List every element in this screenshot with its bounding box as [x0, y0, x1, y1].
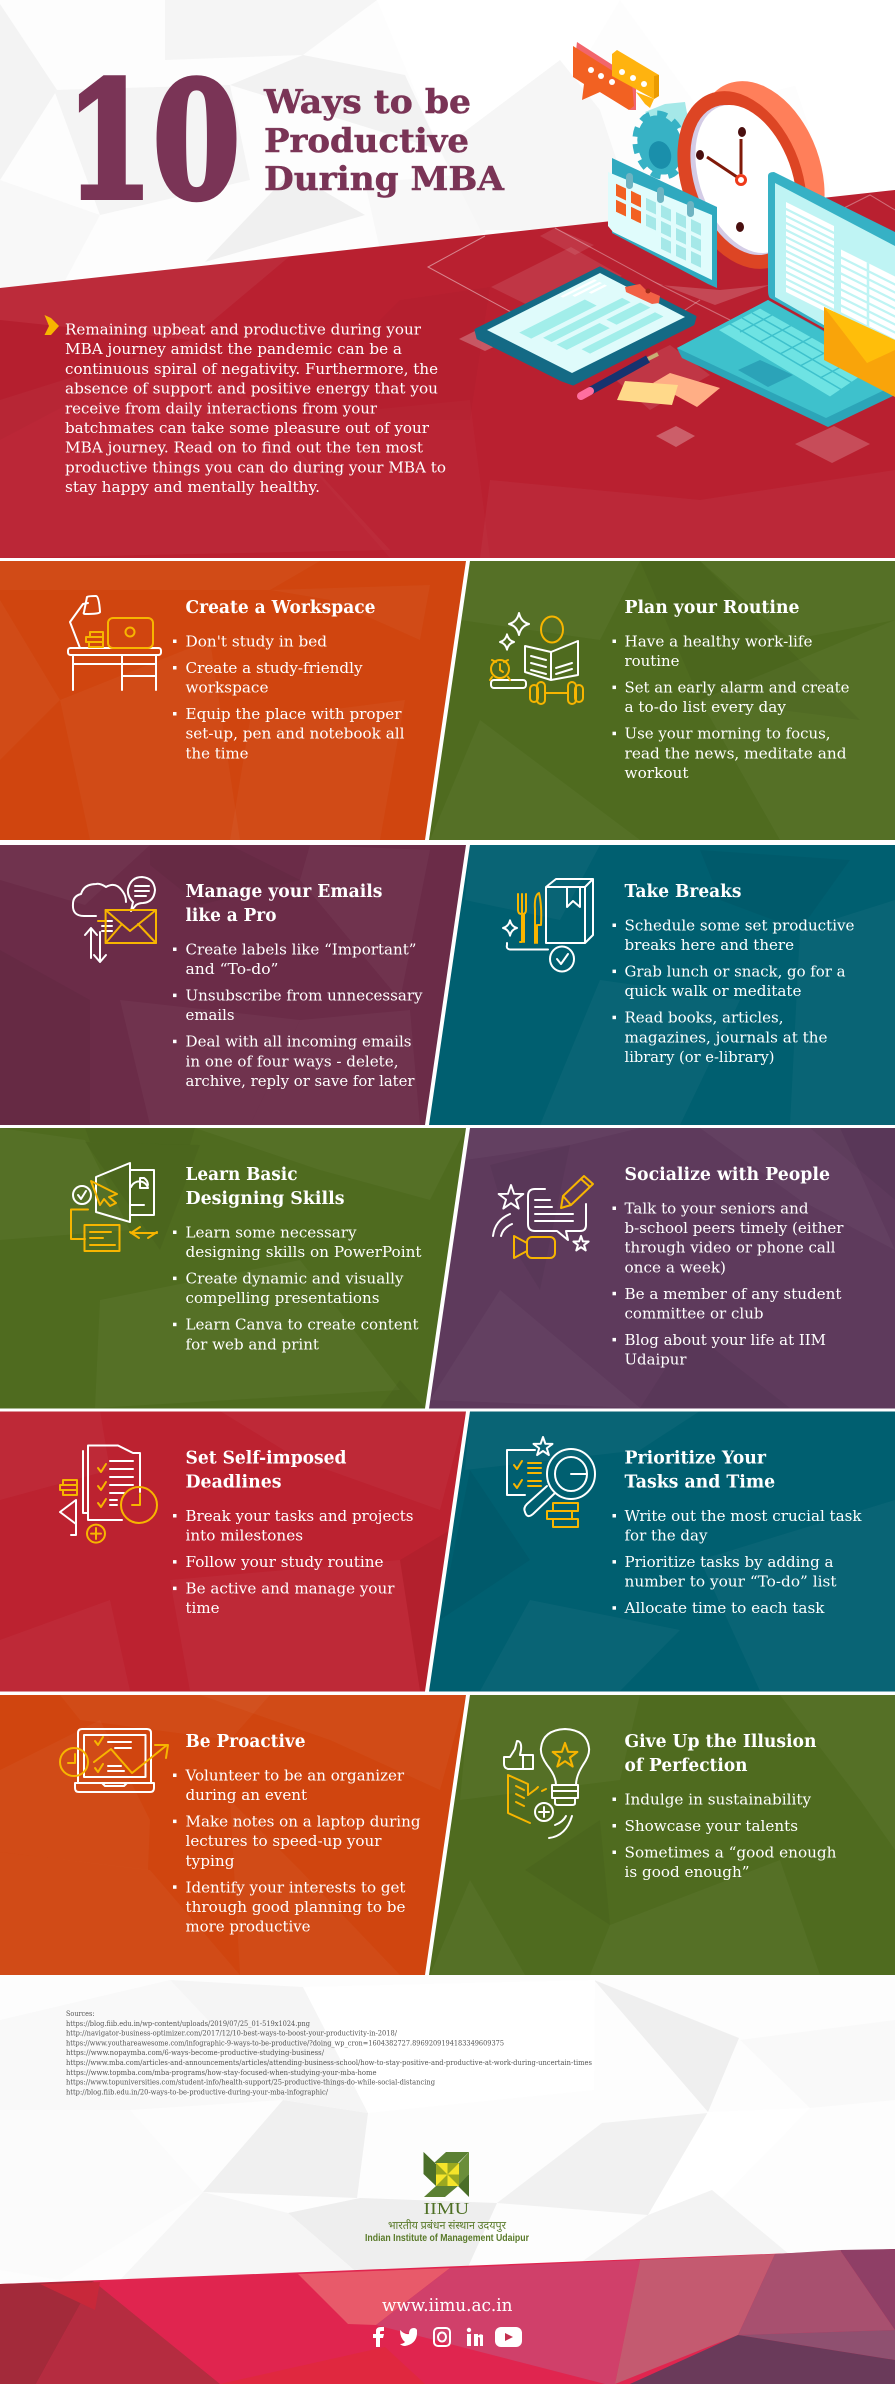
- gear: [631, 102, 690, 180]
- sources list: http://blog.fiib.edu.in/20-ways-to-be-productive-during-your-mba-infographic/: [66, 2087, 328, 2096]
- logo wordmark: IIMU: [424, 2199, 469, 2218]
- panel: Set Self-imposed Deadlines: [0, 1411, 466, 1692]
- bullet list: Follow your study routine: [186, 1555, 384, 1571]
- bullet list: Use your morning to focus,: [624, 727, 830, 743]
- bullet list: Create a study-friendly: [186, 661, 363, 677]
- intro text: stay happy and mentally healthy.: [65, 480, 320, 496]
- icon: facebook: [373, 2327, 384, 2347]
- sources list: https://www.topuniversities.com/student-info/health-support/25-productive-things-do-while-social-distancing: [66, 2078, 435, 2087]
- website: www.iimu.ac.in: [382, 2295, 513, 2316]
- heading: Give Up the Illusion: [624, 1732, 817, 1752]
- heading: like a Pro: [186, 906, 276, 926]
- heading: Tasks and Time: [624, 1472, 775, 1492]
- big number 10: 10: [66, 47, 240, 235]
- bullet list: [173, 1226, 422, 1353]
- icon: instagram: [434, 2328, 450, 2346]
- sources list: https://www.mba.com/articles-and-announcements/articles/attending-business-school/how-to-stay-positive-and-productive-at-work-during-uncertain-times: [66, 2058, 592, 2067]
- bullet list: Blog about your life at IIM: [624, 1333, 826, 1349]
- bullet list: [173, 1768, 420, 1936]
- sources list: Sources:: [66, 2009, 94, 2018]
- bullet list: archive, reply or save for later: [186, 1074, 415, 1090]
- calendar: [608, 158, 717, 288]
- bullet list: Create labels like “Important”: [186, 942, 416, 958]
- bullet list: Allocate time to each task: [623, 1601, 825, 1617]
- heading: Designing Skills: [186, 1189, 345, 1209]
- panel: Manage your Emails like a Pro: [0, 845, 466, 1125]
- hero illustration: desk with clock, calendar, tablet and laptop: [476, 42, 895, 427]
- Hindi name: भारतीय प्रबंधन संस्थान उदयपुर: [388, 2219, 506, 2232]
- heading: Socialize with People: [624, 1165, 830, 1185]
- bullet list: emails: [186, 1008, 234, 1024]
- bullet list: Break your tasks and projects: [186, 1509, 414, 1525]
- laptop screen: [768, 172, 895, 368]
- title text line 2: Productive: [264, 121, 469, 160]
- sticky notes: [617, 373, 720, 407]
- envelope: [824, 307, 895, 397]
- bullet list: breaks here and there: [624, 938, 794, 954]
- bullet list: number to your “To-do” list: [624, 1575, 837, 1591]
- bullet list: Have a healthy work-life: [624, 634, 812, 650]
- icon: desk with lamp and laptop: [68, 596, 161, 690]
- bullet list: Udaipur: [624, 1352, 687, 1368]
- bullet list: lectures to speed-up your: [186, 1834, 382, 1850]
- heading: [186, 882, 383, 926]
- intro text: productive things you can do during your MBA to: [65, 460, 446, 476]
- heading: [186, 1448, 346, 1492]
- sources list: https://www.nopaymba.com/6-ways-become-productive-studying-business/: [66, 2048, 324, 2057]
- panel: Give Up the Illusion of Perfection: [429, 1695, 895, 1975]
- icon: laptop with chart and clock: [60, 1729, 168, 1792]
- intro text: MBA journey. Read on to find out the ten most: [65, 441, 423, 457]
- intro paragraph: [44, 315, 446, 496]
- bullet list: Prioritize tasks by adding a: [624, 1555, 834, 1571]
- bullet list: Create dynamic and visually: [186, 1272, 404, 1288]
- bullet list: Talk to your seniors and: [624, 1202, 808, 1218]
- bullet list: [612, 634, 850, 782]
- bullet list: Sometimes a “good enough: [624, 1846, 836, 1862]
- sources list: [66, 2009, 592, 2096]
- bullet list: Set an early alarm and create: [624, 681, 850, 697]
- bullet list: [612, 918, 854, 1066]
- icon: yellow bullet arrow: [44, 315, 59, 335]
- bullet list: Grab lunch or snack, go for a: [624, 965, 846, 981]
- yellow chat bubble: [612, 50, 659, 108]
- bullet list: more productive: [186, 1920, 310, 1936]
- panel: Socialize with People: [429, 1128, 895, 1408]
- icon: youtube: [495, 2327, 522, 2347]
- heading: of Perfection: [624, 1756, 748, 1776]
- bullet list: [612, 1202, 844, 1368]
- intro text: absence of support and positive energy that you: [65, 382, 438, 398]
- bullet list: set-up, pen and notebook all: [186, 727, 405, 743]
- bullet list: Make notes on a laptop during: [186, 1815, 420, 1831]
- bullet list: Equip the place with proper: [186, 707, 402, 723]
- heading: Take Breaks: [624, 882, 742, 902]
- bullet list: magazines, journals at the: [624, 1030, 828, 1046]
- intro text: receive from daily interactions from your: [65, 401, 377, 417]
- panel: Plan your Routine: [429, 561, 895, 840]
- icon: slides, cursor and document: [71, 1163, 157, 1251]
- intro text: Remaining upbeat and productive during your: [65, 322, 421, 338]
- bullet list: [173, 634, 405, 762]
- sources list: https://blog.fiib.edu.in/wp-content/uploads/2019/07/25_01-519x1024.png: [66, 2019, 310, 2028]
- bullet list: library (or e-library): [624, 1050, 774, 1066]
- panel: Create a Workspace: [0, 561, 466, 840]
- footer band: [0, 2249, 895, 2384]
- bullet list: [173, 1509, 414, 1617]
- hero red band: [0, 190, 895, 558]
- English name: Indian Institute of Management Udaipur: [365, 2233, 529, 2244]
- heading: Prioritize Your: [624, 1448, 767, 1468]
- heading: [186, 1165, 345, 1209]
- intro text: [65, 322, 446, 496]
- bullet list: Be active and manage your: [186, 1582, 395, 1598]
- top low-poly background: [0, 0, 895, 300]
- heading: Create a Workspace: [186, 598, 376, 618]
- laptop: [677, 172, 895, 427]
- bullet list: the time: [186, 746, 248, 762]
- bullet list: through good planning to be: [186, 1900, 406, 1916]
- title: [66, 47, 504, 235]
- hero decorative diamonds: [428, 195, 895, 463]
- bullet list: Showcase your talents: [624, 1819, 798, 1835]
- icon: linkedin: [467, 2328, 483, 2346]
- heading: [624, 1732, 817, 1776]
- orange chat bubble: [573, 42, 636, 110]
- IIMU logo: [365, 2152, 529, 2244]
- intro text: MBA journey amidst the pandemic can be a: [65, 342, 402, 358]
- bullet list: Learn Canva to create content: [186, 1318, 419, 1334]
- bullet list: read the news, meditate and: [624, 746, 846, 762]
- bullet list: designing skills on PowerPoint: [186, 1245, 422, 1261]
- icon: task list, clock and flag: [60, 1446, 157, 1543]
- bullet list: Indulge in sustainability: [624, 1792, 812, 1808]
- bullet list: Be a member of any student: [624, 1287, 842, 1303]
- sources list: http://navigator-business-optimizer.com/2017/12/10-best-ways-to-boost-your-productivity-in-2018/: [66, 2029, 397, 2038]
- title text line 1: Ways to be: [263, 82, 471, 121]
- icon: book, cutlery and check: [503, 879, 593, 972]
- bullet list: Don't study in bed: [186, 634, 327, 650]
- bullet list: through video or phone call: [624, 1241, 836, 1257]
- heading: Learn Basic: [186, 1165, 298, 1185]
- bullet list: Write out the most crucial task: [624, 1509, 862, 1525]
- bullet list: [612, 1792, 836, 1881]
- bullet list: typing: [186, 1854, 234, 1870]
- bullet list: Identify your interests to get: [186, 1880, 406, 1896]
- bullet list: routine: [624, 654, 680, 670]
- heading: Set Self-imposed: [186, 1448, 346, 1468]
- title text line 3: During MBA: [264, 159, 504, 198]
- bullet list: committee or club: [624, 1306, 764, 1322]
- bullet list: Unsubscribe from unnecessary: [186, 989, 423, 1005]
- icon: book, alarm clock and dumbbell: [490, 613, 583, 704]
- bottom low-poly background: [0, 1975, 895, 2295]
- logo mark: pinwheel: [424, 2152, 469, 2197]
- panel: Be Proactive: [0, 1695, 466, 1975]
- panel: Take Breaks: [429, 845, 895, 1125]
- bullet list: workspace: [186, 681, 268, 697]
- intro text: continuous spiral of negativity. Furthermore, the: [65, 362, 438, 378]
- bullet list: Learn some necessary: [186, 1226, 357, 1242]
- panel: Prioritize Your Tasks and Time: [429, 1411, 895, 1692]
- bullet list: workout: [624, 766, 689, 782]
- heading: Be Proactive: [186, 1732, 306, 1752]
- icon: email, cloud and sync arrows: [73, 877, 156, 962]
- bullet list: [173, 942, 423, 1090]
- panel: Learn Basic Designing Skills: [0, 1128, 466, 1408]
- icon: light bulb, thumbs up and book: [504, 1729, 589, 1838]
- pencil: [581, 354, 658, 396]
- bullet list: Read books, articles,: [624, 1011, 784, 1027]
- bullet list: for web and print: [186, 1337, 319, 1353]
- bullet list: a to-do list every day: [624, 700, 787, 716]
- bullet list: compelling presentations: [186, 1291, 380, 1307]
- bullet list: Deal with all incoming emails: [186, 1035, 412, 1051]
- icon: twitter: [400, 2328, 417, 2346]
- icon: checklist, magnifier and star: [507, 1437, 595, 1527]
- bullet list: time: [186, 1601, 220, 1617]
- heading: Manage your Emails: [186, 882, 383, 902]
- sources list: https://www.topmba.com/mba-programs/how-stay-focused-when-studying-your-mba-home: [66, 2068, 376, 2077]
- bullet list: into milestones: [186, 1529, 303, 1545]
- bullet list: b-school peers timely (either: [624, 1221, 844, 1237]
- heading: [624, 1448, 775, 1492]
- intro text: batchmates can take some pleasure out of your: [65, 421, 429, 437]
- bullet list: and “To-do”: [186, 962, 278, 978]
- bullet list: in one of four ways - delete,: [186, 1054, 398, 1070]
- bullet list: quick walk or meditate: [624, 984, 802, 1000]
- bullet list: is good enough”: [624, 1865, 750, 1881]
- bullet list: for the day: [624, 1529, 708, 1545]
- bullet list: during an event: [186, 1788, 307, 1804]
- bullet list: [612, 1509, 862, 1617]
- bullet list: Volunteer to be an organizer: [184, 1768, 404, 1784]
- wall clock: [654, 63, 848, 287]
- icon: chat note, stars and video camera: [493, 1176, 593, 1258]
- bullet list: Schedule some set productive: [624, 918, 854, 934]
- bullet list: once a week): [624, 1260, 726, 1276]
- heading: Deadlines: [186, 1472, 282, 1492]
- tablet clipboard: [476, 268, 695, 384]
- sources list: https://www.youthareawesome.com/infographic-9-ways-to-be-productive/?doing_wp_cron=1604382727.8969209194183349609375: [66, 2038, 504, 2047]
- heading: Plan your Routine: [624, 598, 800, 618]
